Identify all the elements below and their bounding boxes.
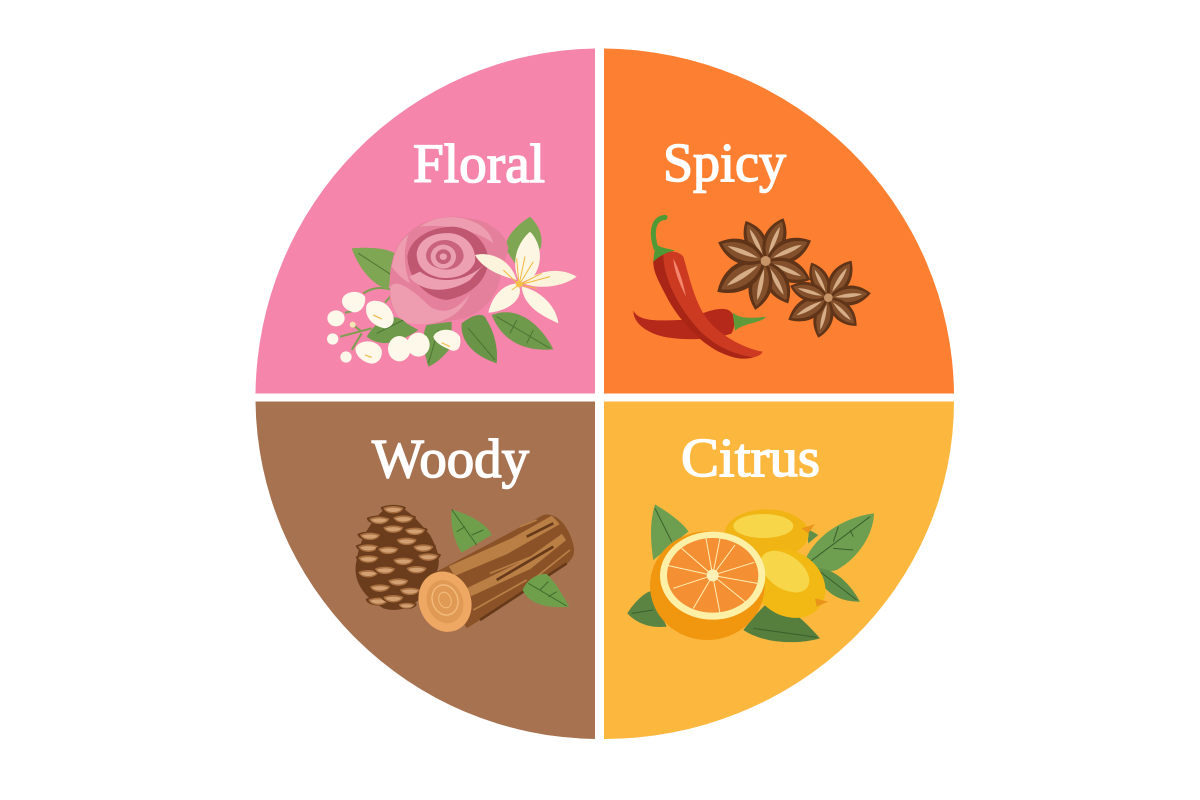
heading: Spicy: Spicy (663, 132, 786, 193)
spicy quadrant background (604, 48, 954, 394)
heading: Woody: Woody (372, 428, 529, 489)
icon: orange, lemons and leaves (627, 504, 874, 642)
panel: spicy (604, 48, 954, 394)
floral quadrant background (256, 48, 595, 394)
panel: woody (256, 402, 595, 739)
panel: floral (256, 48, 595, 394)
icon: pine cone, log and leaves (356, 505, 574, 639)
panel: citrus (604, 402, 954, 739)
heading: Citrus: Citrus (681, 427, 820, 488)
icon: rose, lily and white blossoms (327, 217, 577, 367)
citrus quadrant background (604, 402, 954, 739)
woody quadrant background (256, 402, 595, 739)
icon: red chillies and star anise (633, 214, 872, 359)
heading: Floral: Floral (413, 133, 545, 194)
